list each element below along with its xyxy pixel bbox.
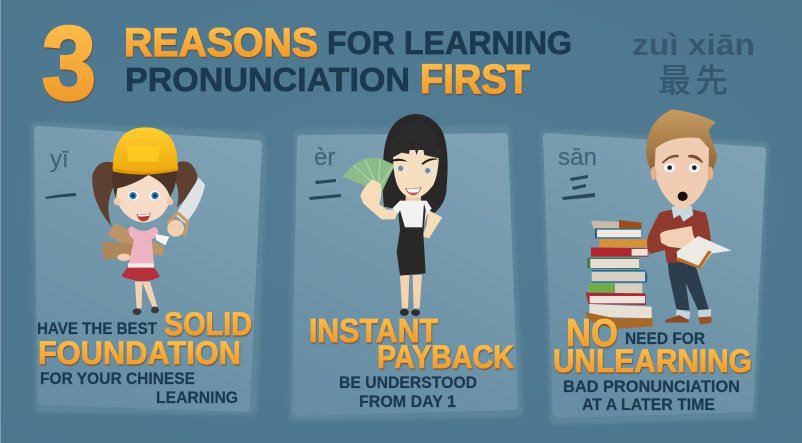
right pigtail <box>175 161 197 207</box>
illustration: businesswoman holding money <box>342 114 448 316</box>
book 2 <box>595 228 641 238</box>
hair back <box>383 114 448 214</box>
title word: PRONUNCIATION: PRONUNCIATION <box>125 61 410 98</box>
panel card <box>296 137 514 412</box>
book 1 <box>591 221 642 228</box>
caption: at a later time: AT A LATER TIME <box>582 395 715 414</box>
caption: instant: INSTANT <box>309 312 438 349</box>
caption: have the best: HAVE THE BEST <box>37 319 158 338</box>
caption: bad pronunciation: BAD PRONUNCIATION <box>563 377 740 396</box>
eyes <box>664 163 675 172</box>
caption: solid: SOLID <box>164 306 252 342</box>
caption: be understood: BE UNDERSTOOD <box>339 373 477 392</box>
eyes and brows <box>392 159 408 162</box>
hanzi: two <box>309 179 341 200</box>
book stack <box>586 220 653 329</box>
mouth <box>405 187 422 195</box>
chinese word: zui xian <box>632 27 755 99</box>
caption <box>37 306 252 407</box>
saw <box>175 178 205 223</box>
panel halo <box>545 134 764 420</box>
book 5 <box>587 258 639 269</box>
caption: for your chinese: FOR YOUR CHINESE <box>40 369 195 388</box>
shoes <box>665 315 689 323</box>
hanzi: 最先 <box>658 62 728 99</box>
mouth <box>678 192 688 201</box>
left pigtail <box>92 162 117 227</box>
hands <box>167 220 184 237</box>
book 8 <box>586 293 646 305</box>
hanzi: one <box>45 193 76 199</box>
sleeve arm <box>156 234 169 245</box>
book 3 <box>599 239 650 247</box>
ears <box>651 167 657 180</box>
planks <box>107 223 164 256</box>
legs <box>135 282 142 308</box>
big number 3: 3 <box>42 6 96 122</box>
neck <box>406 195 421 205</box>
book 6 <box>592 270 648 283</box>
panel: instant payback <box>294 114 518 416</box>
panel halo <box>294 130 518 416</box>
illustration: girl with helmet, saw and planks <box>92 127 205 315</box>
hip arm <box>422 210 442 238</box>
collar <box>672 206 693 222</box>
caption: need for: NEED FOR <box>625 329 705 348</box>
panel halo <box>36 127 262 410</box>
caption: foundation: FOUNDATION <box>38 335 241 371</box>
trousers <box>668 262 709 311</box>
title word: REASONS: REASONS <box>124 21 318 65</box>
mouth <box>137 213 151 221</box>
pinyin: san: sān <box>558 144 597 171</box>
helmet <box>113 127 178 173</box>
eyes <box>128 191 138 200</box>
caption <box>553 312 752 414</box>
title word: FIRST: FIRST <box>420 56 530 102</box>
trouser cuffs <box>676 309 690 319</box>
raised arm <box>367 200 398 219</box>
fringe <box>391 122 439 158</box>
illustration: man reading beside a pile of books <box>586 109 732 329</box>
caption: from day 1: FROM DAY 1 <box>359 392 456 411</box>
dress <box>397 203 426 276</box>
caption <box>309 312 514 411</box>
shirt <box>128 227 158 264</box>
book 7 <box>588 283 642 293</box>
shoes <box>133 308 141 315</box>
head <box>115 170 172 222</box>
book 4 <box>591 247 648 257</box>
blouse <box>392 201 432 227</box>
caption: learning: LEARNING <box>156 388 238 407</box>
hanzi: three <box>562 175 595 200</box>
book 9 <box>589 304 652 318</box>
caption: unlearning: UNLEARNING <box>553 343 752 379</box>
title <box>42 6 572 122</box>
caption: no: NO <box>566 312 618 355</box>
face <box>654 138 709 209</box>
panel card <box>38 130 258 408</box>
pinyin: yi: yī <box>50 146 69 173</box>
title words: FOR LEARNING: FOR LEARNING <box>327 25 572 61</box>
pinyin: zuì xiān <box>632 27 755 62</box>
panel: no need for unlearning <box>545 109 764 420</box>
money fan <box>342 158 395 194</box>
legs <box>400 275 409 308</box>
open book <box>677 236 732 269</box>
fringe <box>112 170 177 198</box>
hand <box>660 226 699 248</box>
hair <box>646 109 717 175</box>
pinyin: er: èr <box>314 144 335 171</box>
hand <box>360 179 381 208</box>
shoes <box>400 309 409 316</box>
face <box>393 150 439 198</box>
sweater <box>647 209 712 263</box>
brows <box>662 155 679 163</box>
caption: payback: PAYBACK <box>377 339 514 375</box>
book 10 <box>586 312 653 329</box>
skirt <box>121 266 160 281</box>
panel: solid foundation <box>36 127 262 410</box>
panel card <box>547 137 762 414</box>
